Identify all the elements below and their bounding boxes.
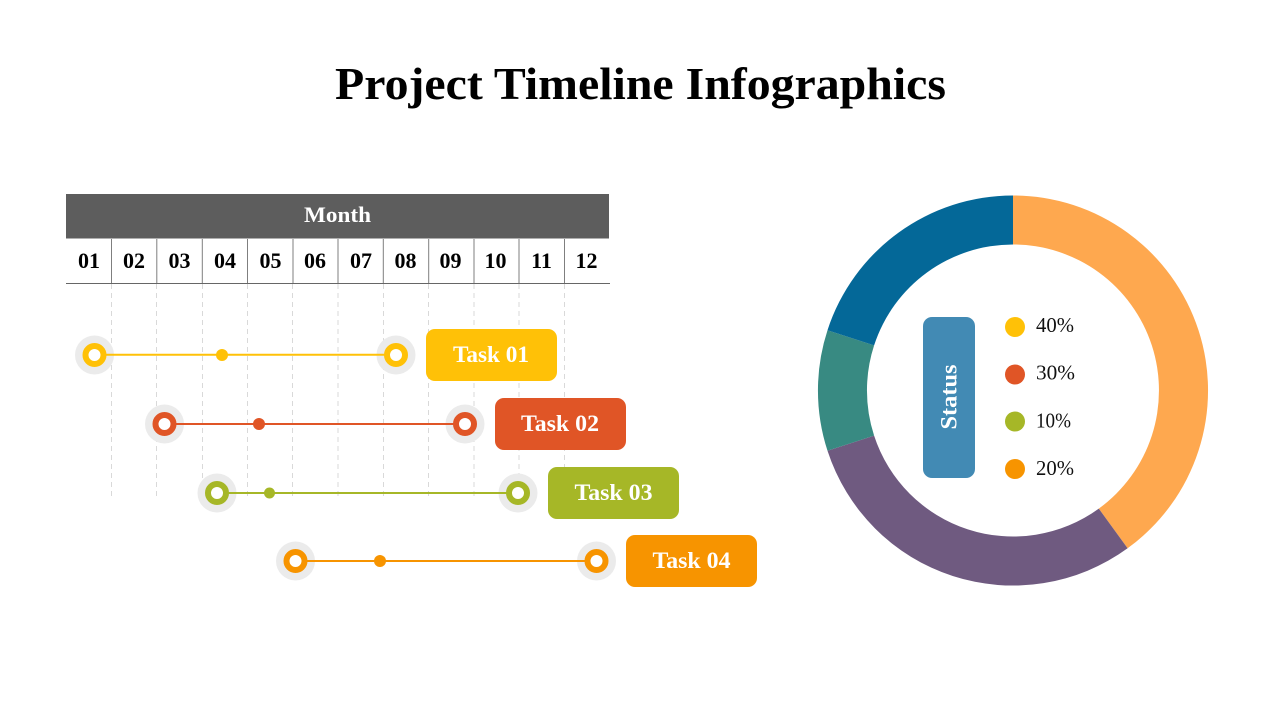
task 03 timeline — [198, 467, 679, 519]
status box — [923, 317, 975, 478]
month cells: 11 — [531, 248, 552, 273]
legend — [1005, 313, 1075, 480]
month cells: 08 — [394, 248, 416, 273]
task 04 label: Task 04 — [652, 548, 731, 573]
status box: Status — [936, 364, 962, 430]
legend item 40%: 40% — [1036, 313, 1074, 337]
task 04 label — [626, 535, 757, 587]
task 03 label: Task 03 — [574, 480, 652, 505]
task 01 label: Task 01 — [453, 342, 529, 367]
legend item 10%: 10% — [1036, 408, 1071, 432]
legend item 30% — [1005, 360, 1075, 384]
donut chart — [818, 196, 1208, 586]
month cells: 03 — [168, 248, 190, 273]
month cells — [66, 239, 610, 284]
title: Project Timeline Infographics — [335, 58, 946, 109]
legend item 40% — [1005, 313, 1074, 337]
task 01 timeline — [75, 329, 557, 381]
month cells: 09 — [440, 248, 462, 273]
legend item 20% — [1005, 456, 1074, 480]
legend item 10% — [1005, 408, 1071, 432]
month cells: 12 — [576, 248, 598, 273]
month cells: 07 — [350, 248, 372, 273]
month cells: 06 — [304, 248, 326, 273]
task 02 label — [495, 398, 626, 450]
task 01 label — [426, 329, 557, 381]
task 04 timeline — [276, 535, 757, 587]
task 02 label: Task 02 — [521, 411, 599, 436]
legend item 30%: 30% — [1036, 360, 1075, 384]
task 02 timeline — [145, 398, 626, 450]
month cells: 01 — [78, 248, 100, 273]
task 03 label — [548, 467, 679, 519]
month cells: 05 — [260, 248, 282, 273]
month table — [66, 194, 610, 284]
month header — [66, 194, 609, 238]
month header: Month — [304, 202, 371, 227]
month cells: 02 — [123, 248, 145, 273]
month cells: 10 — [484, 248, 506, 273]
month cells: 04 — [214, 248, 236, 273]
legend item 20%: 20% — [1036, 456, 1074, 480]
